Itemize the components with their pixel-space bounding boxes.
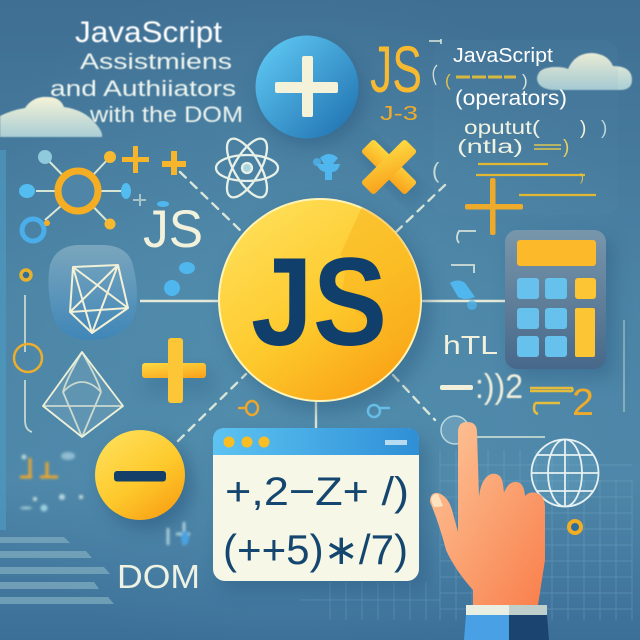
small ring icon — [14, 270, 42, 372]
code panel: ( — [432, 158, 440, 183]
code panel: ( — [445, 71, 451, 90]
yellow JS label: J-3 — [380, 103, 418, 125]
window formula: +,2−Z+ /) — [225, 470, 409, 514]
window dots — [224, 436, 270, 448]
pointing hand — [430, 422, 545, 605]
background grid lower right — [300, 450, 632, 620]
atom icon — [216, 133, 278, 203]
minus circle — [95, 430, 194, 530]
plus circle — [256, 36, 364, 146]
calculator buttons — [517, 278, 596, 357]
window formula: (++5)∗/7) — [223, 526, 408, 573]
yellow thin plus — [465, 178, 523, 235]
small blue marks — [157, 154, 477, 310]
yellow JS label: JS — [370, 32, 422, 106]
small orange ring glyph — [238, 401, 258, 415]
small swirl glyph — [368, 405, 390, 417]
diamond wireframe icon — [43, 352, 123, 437]
code panel: JavaScript — [453, 45, 553, 67]
yellow plus — [142, 338, 214, 403]
JS letters: JS — [251, 233, 387, 372]
code panel: (operators) — [455, 87, 567, 110]
window header — [213, 428, 419, 455]
shield icon — [48, 245, 137, 340]
central JS badge — [218, 198, 432, 414]
code panel: ) — [522, 71, 528, 90]
scattered small symbols lower left — [20, 452, 190, 545]
network node icon — [19, 150, 131, 241]
title: JavaScript — [75, 16, 223, 49]
title: Assistmiens — [80, 49, 232, 74]
touch ripple — [441, 416, 469, 444]
code panel: (ntla) — [457, 137, 523, 158]
multiply icon — [345, 123, 433, 211]
calculator — [505, 230, 614, 378]
shirt cuff and sleeve — [464, 605, 549, 640]
code panel: oputut( — [464, 118, 541, 139]
app window — [213, 428, 428, 590]
title: and Authiiators — [50, 76, 236, 101]
DOM label: DOM — [117, 558, 200, 595]
faint small plus — [133, 194, 146, 206]
globe icon — [532, 439, 599, 507]
calculator screen — [517, 240, 596, 266]
cream JS label: JS — [143, 200, 203, 259]
small bracket marks — [451, 231, 476, 273]
HTML label: hTL — [443, 330, 498, 360]
title — [50, 16, 243, 127]
window formula — [223, 470, 409, 573]
code panel — [429, 39, 618, 215]
math expression row: 2 — [572, 382, 594, 424]
small orange ring — [569, 521, 581, 533]
right cloud — [537, 53, 632, 90]
yellow JS label — [370, 32, 422, 125]
code panel: ) — [580, 118, 586, 139]
code panel: ) — [580, 172, 584, 184]
code panel: ) — [601, 118, 607, 139]
math expression row — [440, 368, 594, 424]
bottom left stripes — [0, 537, 114, 604]
connector lines — [25, 172, 624, 441]
title: with the DOM — [89, 102, 243, 127]
code panel: ) — [563, 137, 569, 158]
math expression row: :))2 — [475, 368, 523, 406]
yellow plus pair — [122, 146, 186, 175]
left cloud — [0, 97, 102, 137]
